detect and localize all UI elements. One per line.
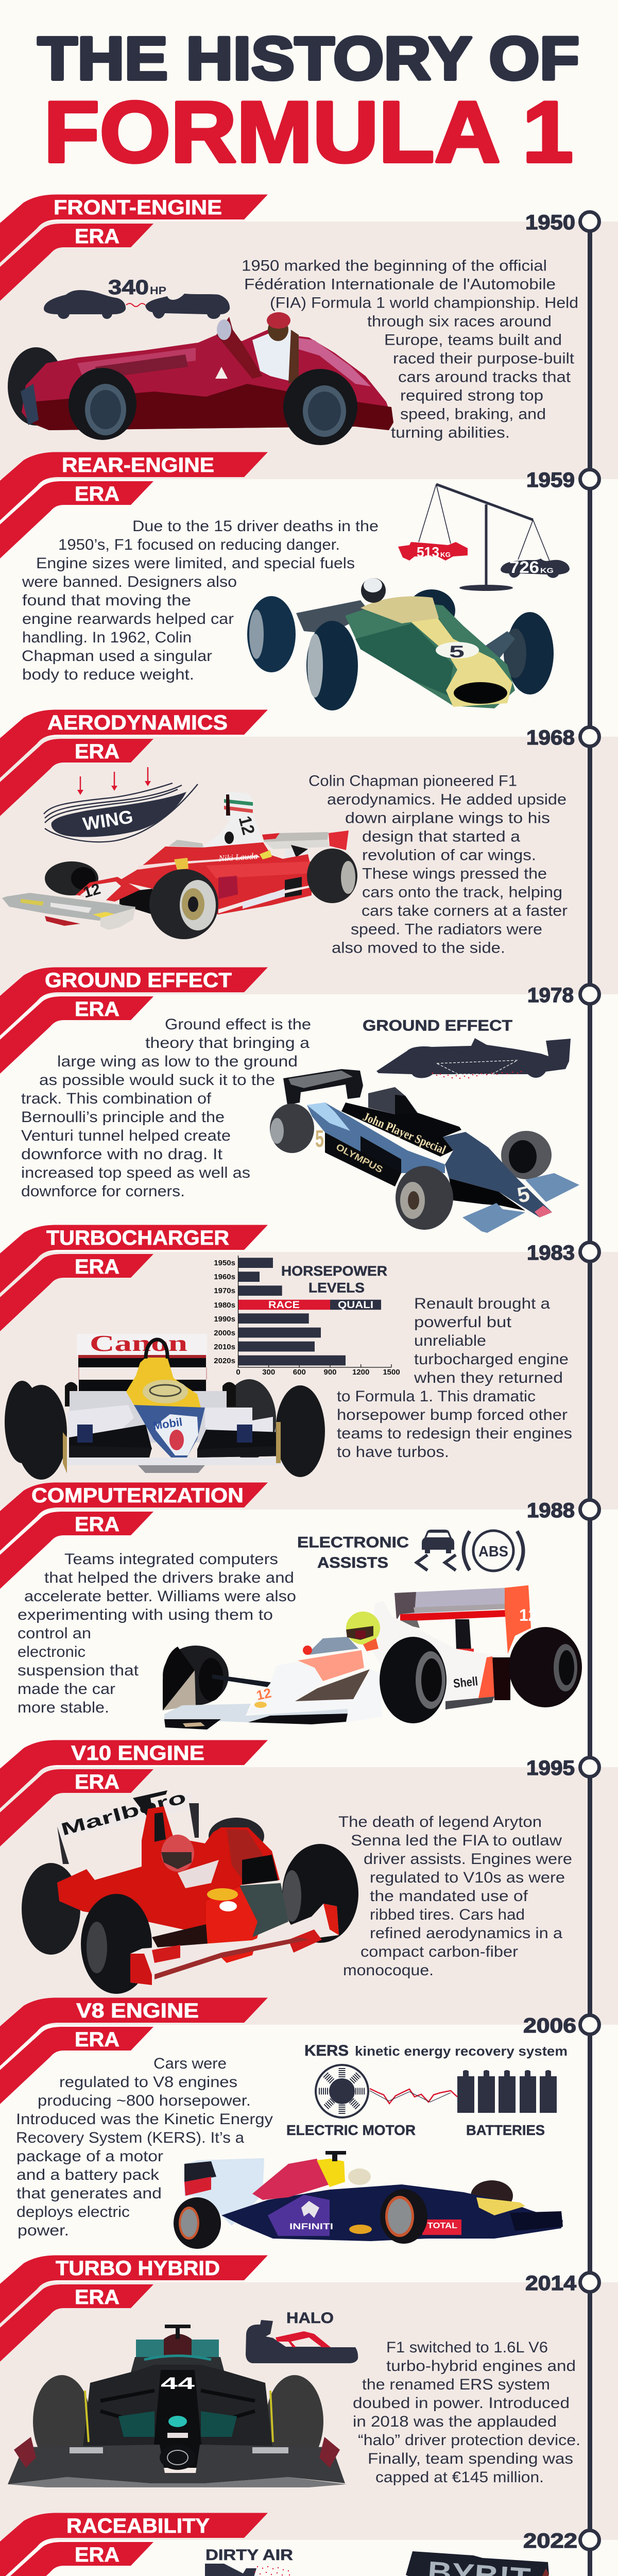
- text: 1968 description: revolution of car wings.: [362, 847, 536, 863]
- heading ribbon: computerization era: [0, 1483, 268, 1589]
- text: 1968 description: aerodynamics. He added upside: [327, 791, 566, 808]
- text: 2006 description: [16, 2055, 273, 2239]
- text: 1959 description: found that moving the: [22, 592, 191, 609]
- heading ribbon: v8 engine era: V8 ENGINE: [76, 1999, 199, 2022]
- timeline marker 1995: [526, 1757, 599, 1780]
- car: 1983 Williams: [5, 1331, 325, 1480]
- text: 1959 description: Chapman used a singular: [22, 648, 212, 665]
- chart: horsepower levels: 1200: [352, 1368, 369, 1377]
- timeline marker 1968: 1968: [526, 726, 575, 749]
- text: 1978 description: increased top speed as well as: [21, 1164, 250, 1181]
- icon: ground effect silhouette: GROUND EFFECT: [363, 1017, 512, 1035]
- heading ribbon: front-engine era: FRONT-ENGINE: [54, 196, 222, 219]
- car: 1978 Lotus JPS: OLYMPUS: [334, 1142, 385, 1175]
- chart: horsepower levels: QUALI: [338, 1300, 373, 1311]
- title: [38, 25, 579, 180]
- chart: horsepower levels: 2020s: [214, 1357, 235, 1365]
- text: 1995 description: Senna led the FIA to outlaw: [351, 1832, 562, 1849]
- panel: computerization era 1988: [0, 1483, 618, 1767]
- text: 1983 description: powerful but: [414, 1314, 512, 1331]
- chart: horsepower levels: 1980s: [214, 1301, 235, 1310]
- heading ribbon: computerization era: COMPUTERIZATION: [31, 1484, 244, 1507]
- car: 1978 Lotus JPS: 5: [515, 1181, 532, 1208]
- heading ribbon: rear-engine era: ERA: [75, 483, 119, 505]
- text: 1983 description: unreliable: [414, 1332, 486, 1349]
- icon: 340hp silhouettes: HP: [150, 285, 166, 297]
- text: 1978 description: Venturi tunnel helped create: [21, 1127, 231, 1144]
- car: 1968 Ferrari: 12: [235, 814, 259, 837]
- text: 1968 description: speed. The radiators were: [351, 921, 542, 938]
- text: 1988 description: that helped the drivers brake and: [44, 1569, 294, 1586]
- car: 1983 Williams: Mobil: [152, 1415, 183, 1432]
- timeline: [523, 211, 599, 2576]
- text: 1959 description: Engine sizes were limited, and special fuels: [36, 555, 355, 572]
- icon: wing downforce: WING: [81, 806, 134, 835]
- panel: turbo hybrid era 2014: [0, 2256, 618, 2540]
- car: 1983 Williams: Canon: [90, 1331, 187, 1356]
- timeline marker 1988: [527, 1499, 599, 1522]
- heading ribbon: aerodynamics era: ERA: [75, 740, 119, 763]
- icon: electronic assists: [297, 1530, 523, 1571]
- text: 1959 description: handling. In 1962, Colin: [22, 629, 192, 646]
- timeline marker 2006: [523, 2014, 599, 2037]
- text: 1983 description: Renault brought a: [414, 1295, 550, 1312]
- heading ribbon: front-engine era: [0, 195, 268, 301]
- chart: horsepower levels: 1960s: [214, 1273, 235, 1281]
- text: 1978 description: downforce with no drag. It: [21, 1146, 223, 1163]
- text: 1978 description: downforce for corners.: [21, 1183, 185, 1200]
- timeline marker 1950: [525, 211, 599, 234]
- text: 1978 description: track. This combination of: [21, 1090, 212, 1107]
- icon: weight scale: KG: [540, 566, 554, 574]
- car: 1995 Ferrari: [22, 1787, 358, 1994]
- chart: horsepower levels: 1500: [383, 1368, 400, 1377]
- car: 2022 Red Bull RB18: [230, 2551, 582, 2576]
- timeline marker 1978: 1978: [527, 984, 574, 1007]
- text: 2014 description: turbo-hybrid engines and: [386, 2358, 576, 2375]
- text: 1995 description: monocoque.: [343, 1962, 434, 1979]
- text: 1959 description: Due to the 15 driver deaths in the: [132, 518, 379, 535]
- panel: raceability era 2022: [0, 2513, 618, 2576]
- text: 1995 description: the mandated use of: [370, 1888, 528, 1905]
- text: 1959 description: were banned. Designers also: [22, 573, 237, 590]
- chart: horsepower levels: 2010s: [214, 1343, 235, 1351]
- panel: v10 engine era 1995: [0, 1740, 618, 2025]
- text: 1950 description: cars around tracks that: [398, 369, 571, 385]
- icon: halo: [246, 2310, 358, 2363]
- text: 1995 description: [338, 1814, 572, 1979]
- car: 2006 Red Bull: INFINITI: [289, 2222, 333, 2231]
- heading ribbon: rear-engine era: [0, 452, 268, 558]
- car: 1988 McLaren: [163, 1585, 582, 1730]
- text: 2006 description: package of a motor: [16, 2148, 163, 2165]
- icon: KERS diagram: ELECTRIC MOTOR: [286, 2122, 416, 2138]
- icon: weight scale: [398, 484, 570, 591]
- heading ribbon: raceability era: ERA: [75, 2544, 119, 2566]
- text: 1950 description: through six races around: [367, 313, 552, 330]
- chart: horsepower levels: 1950s: [214, 1259, 235, 1267]
- text: 1983 description: turbocharged engine: [414, 1351, 569, 1368]
- icon: electronic assists: ASSISTS: [317, 1554, 388, 1571]
- text: 1968 description: Colin Chapman pioneered F1: [308, 773, 517, 789]
- text: 2006 description: power.: [18, 2222, 69, 2239]
- text: 1988 description: accelerate better. Williams were also: [24, 1588, 296, 1605]
- text: 1950 description: turning abilities.: [391, 425, 510, 441]
- text: 1995 description: refined aerodynamics in a: [370, 1925, 562, 1942]
- icon: electronic assists: ELECTRONIC: [297, 1534, 409, 1551]
- text: 2006 description: deploys electric: [16, 2204, 130, 2221]
- text: 1950 description: required strong top: [400, 387, 543, 404]
- text: 1950 description: speed, braking, and: [400, 406, 546, 422]
- timeline marker 1978: [527, 984, 599, 1007]
- car: 1978 Lotus JPS: John Player Special: [361, 1110, 448, 1157]
- text: 1983 description: [337, 1295, 572, 1461]
- text: 2006 description: Recovery System (KERS). It’s a: [16, 2129, 244, 2146]
- panel: aerodynamics era 1968: [0, 710, 618, 994]
- panel: v8 engine era 2006: [0, 1998, 618, 2282]
- text: 2006 description: Introduced was the Kinetic Energy: [16, 2111, 273, 2128]
- chart: horsepower levels: [214, 1256, 400, 1377]
- text: 1995 description: ribbed tires. Cars had: [370, 1906, 525, 1923]
- icon: ground effect silhouette: [363, 1017, 571, 1078]
- text: 2006 description: regulated to V8 engines: [59, 2074, 237, 2091]
- icon: 340hp silhouettes: [44, 276, 230, 319]
- text: 1983 description: when they returned: [414, 1369, 563, 1386]
- panel: front-engine era 1950: [0, 195, 618, 479]
- text: 1959 description: 1950’s, F1 focused on reducing danger.: [58, 536, 340, 553]
- chart: horsepower levels: 300: [262, 1368, 275, 1377]
- text: 2006 description: Cars were: [153, 2055, 227, 2072]
- panel: ground effect era 1978: [0, 968, 618, 1252]
- text: 1995 description: driver assists. Engines were: [364, 1851, 572, 1868]
- title: THE HISTORY OF: [38, 25, 579, 93]
- icon: halo: HALO: [286, 2310, 334, 2327]
- text: 1950 description: Fédération Internationale de l'Automobile: [244, 276, 556, 293]
- timeline marker 1959: 1959: [526, 469, 575, 492]
- text: 1968 description: also moved to the side.: [332, 940, 505, 956]
- text: 2014 description: Finally, team spending was: [368, 2450, 573, 2467]
- text: 2014 description: “halo” driver protection device.: [358, 2432, 580, 2449]
- car: 1978 Lotus JPS: [270, 1069, 579, 1233]
- icon: 340hp silhouettes: 340: [108, 276, 149, 299]
- heading ribbon: turbo hybrid era: [0, 2256, 268, 2362]
- text: 1978 description: Bernoulli’s principle and the: [21, 1109, 225, 1126]
- icon: wing downforce: [44, 767, 198, 842]
- car: 1995 Ferrari: Marlboro: [59, 1787, 188, 1840]
- chart: horsepower levels: 2000s: [214, 1329, 235, 1337]
- text: 1968 description: [308, 773, 568, 956]
- text: 1968 description: cars onto the track, helping: [362, 884, 562, 901]
- heading ribbon: v10 engine era: ERA: [75, 1771, 119, 1793]
- text: 1988 description: more stable.: [18, 1699, 109, 1716]
- text: 1978 description: theory that bringing a: [145, 1035, 310, 1052]
- timeline marker 2022: 2022: [523, 2530, 577, 2552]
- timeline marker 1995: 1995: [526, 1757, 575, 1780]
- text: 2014 description: doubed in power. Introduced: [353, 2395, 570, 2412]
- heading ribbon: v8 engine era: ERA: [75, 2028, 119, 2051]
- heading ribbon: rear-engine era: REAR-ENGINE: [62, 454, 214, 477]
- text: 1983 description: to have turbos.: [337, 1444, 449, 1461]
- text: 1978 description: [21, 1016, 311, 1200]
- heading ribbon: raceability era: [0, 2513, 268, 2576]
- text: 1988 description: electronic: [18, 1643, 85, 1660]
- icon: KERS diagram: BATTERIES: [466, 2122, 545, 2138]
- text: 2014 description: F1 switched to 1.6L V6: [386, 2339, 548, 2356]
- text: 1959 description: [22, 518, 379, 683]
- car: 1968 Ferrari: [2, 792, 357, 939]
- text: 1988 description: [18, 1551, 296, 1716]
- heading ribbon: aerodynamics era: [0, 710, 268, 816]
- car: 2014 Mercedes: 44: [161, 2374, 195, 2393]
- car: 1950 Alfa Romeo: [8, 312, 393, 445]
- text: 1959 description: body to reduce weight.: [22, 666, 194, 683]
- text: 1988 description: made the car: [18, 1681, 115, 1698]
- title: FORMULA 1: [44, 83, 573, 180]
- text: 1978 description: large wing as low to the ground: [57, 1053, 298, 1070]
- text: 1988 description: control an: [18, 1625, 91, 1642]
- chart: horsepower levels: 0: [236, 1368, 241, 1377]
- car: 1968 Ferrari: Niki Lauda: [218, 851, 258, 863]
- text: 1968 description: design that started a: [362, 828, 520, 845]
- icon: weight scale: KG: [440, 551, 451, 558]
- text: 1950 description: [242, 258, 578, 441]
- icon: dirty air: [205, 2547, 295, 2576]
- heading ribbon: ground effect era: ERA: [75, 998, 119, 1021]
- text: 1978 description: Ground effect is the: [165, 1016, 311, 1033]
- timeline marker 1968: [526, 726, 599, 749]
- car: 1959 Lotus: 5: [449, 642, 465, 661]
- text: 2006 description: producing ~800 horsepower.: [38, 2092, 251, 2109]
- icon: weight scale: 513: [417, 544, 439, 560]
- text: 1983 description: horsepower bump forced other: [337, 1406, 568, 1423]
- timeline marker 2014: 2014: [525, 2272, 577, 2295]
- car: 2006 Red Bull: [174, 2151, 563, 2249]
- chart: horsepower levels: 1970s: [214, 1286, 235, 1295]
- text: 1978 description: as possible would suck it to the: [39, 1072, 275, 1089]
- icon: KERS diagram: [286, 2042, 568, 2138]
- heading ribbon: v10 engine era: V10 ENGINE: [71, 1742, 204, 1765]
- timeline marker 2022: [523, 2530, 599, 2552]
- text: 2014 description: the renamed ERS system: [362, 2376, 550, 2393]
- car: 1988 McLaren: Shell: [453, 1674, 478, 1691]
- heading ribbon: raceability era: RACEABILITY: [66, 2515, 210, 2537]
- heading ribbon: ground effect era: [0, 968, 268, 1074]
- heading ribbon: aerodynamics era: AERODYNAMICS: [47, 711, 228, 734]
- timeline marker 1983: [527, 1242, 599, 1264]
- text: 1983 description: to Formula 1. This dramatic: [337, 1388, 536, 1405]
- heading ribbon: front-engine era: ERA: [75, 225, 119, 248]
- icon: weight scale: 726: [509, 558, 539, 577]
- car: 1978 Lotus JPS: 5: [315, 1125, 324, 1152]
- text: 1950 description: 1950 marked the beginning of the official: [242, 258, 547, 274]
- chart: horsepower levels: HORSEPOWER: [281, 1263, 387, 1279]
- car: 1988 McLaren: 12: [519, 1606, 538, 1624]
- icon: dirty air: DIRTY AIR: [205, 2547, 293, 2564]
- text: 2006 description: that generates and: [16, 2185, 162, 2202]
- heading ribbon: turbo hybrid era: ERA: [75, 2286, 119, 2309]
- icon: KERS diagram: KERS: [304, 2042, 349, 2059]
- chart: horsepower levels: 600: [293, 1368, 306, 1377]
- timeline marker 2014: [525, 2272, 599, 2295]
- text: 1995 description: The death of legend Aryton: [338, 1814, 542, 1831]
- car: 1968 Ferrari: 12: [81, 880, 102, 902]
- timeline marker 1959: [526, 469, 599, 492]
- heading ribbon: v8 engine era: [0, 1998, 268, 2104]
- chart: horsepower levels: 900: [323, 1368, 337, 1377]
- text: 1950 description: Europe, teams built and: [384, 332, 562, 348]
- text: 1968 description: down airplane wings to his: [345, 810, 550, 826]
- text: 2014 description: in 2018 was the applauded: [353, 2413, 557, 2430]
- chart: horsepower levels: LEVELS: [308, 1280, 365, 1296]
- panel: rear-engine era 1959: [0, 452, 618, 737]
- text: 1950 description: (FIA) Formula 1 world championship. Held: [270, 295, 578, 311]
- heading ribbon: turbocharger era: ERA: [75, 1256, 119, 1278]
- icon: KERS diagram: kinetic energy recovery system: [355, 2043, 568, 2059]
- heading ribbon: computerization era: ERA: [75, 1513, 119, 1536]
- car: 1959 Lotus: [247, 578, 554, 710]
- car: 1988 McLaren: 12: [255, 1685, 273, 1703]
- timeline marker 1950: 1950: [525, 211, 575, 234]
- heading ribbon: turbocharger era: TURBOCHARGER: [46, 1227, 229, 1249]
- heading ribbon: turbo hybrid era: TURBO HYBRID: [56, 2257, 220, 2280]
- text: 1950 description: raced their purpose-built: [393, 350, 575, 367]
- text: 1959 description: engine rearwards helped car: [22, 611, 234, 628]
- text: 1968 description: cars take corners at a faster: [362, 903, 568, 919]
- car: 2006 Red Bull: TOTAL: [427, 2222, 457, 2230]
- timeline marker 1988: 1988: [527, 1499, 575, 1522]
- panel: turbocharger era 1983: [0, 1225, 618, 1510]
- heading ribbon: turbocharger era: [0, 1225, 268, 1331]
- heading ribbon: ground effect era: GROUND EFFECT: [45, 969, 232, 992]
- text: 1988 description: suspension that: [18, 1662, 139, 1679]
- text: 1988 description: Teams integrated computers: [64, 1551, 278, 1568]
- chart: horsepower levels: 1990s: [214, 1315, 235, 1324]
- text: 1988 description: experimenting with using them to: [18, 1606, 273, 1623]
- timeline marker 2006: 2006: [523, 2014, 576, 2037]
- text: 1995 description: compact carbon-fiber: [360, 1943, 518, 1960]
- heading ribbon: v10 engine era: [0, 1740, 268, 1846]
- icon: electronic assists: ABS: [478, 1544, 508, 1560]
- text: 1995 description: regulated to V10s as were: [370, 1869, 565, 1886]
- timeline marker 1983: 1983: [527, 1242, 575, 1264]
- text: 2014 description: capped at €145 million.: [375, 2469, 544, 2486]
- text: 1983 description: teams to redesign their engines: [337, 1425, 572, 1442]
- text: 2014 description: [353, 2339, 580, 2486]
- chart: horsepower levels: RACE: [268, 1300, 300, 1311]
- text: 2006 description: and a battery pack: [16, 2166, 160, 2183]
- car: 2014 Mercedes: [8, 2325, 347, 2487]
- text: 1968 description: These wings pressed the: [362, 866, 547, 882]
